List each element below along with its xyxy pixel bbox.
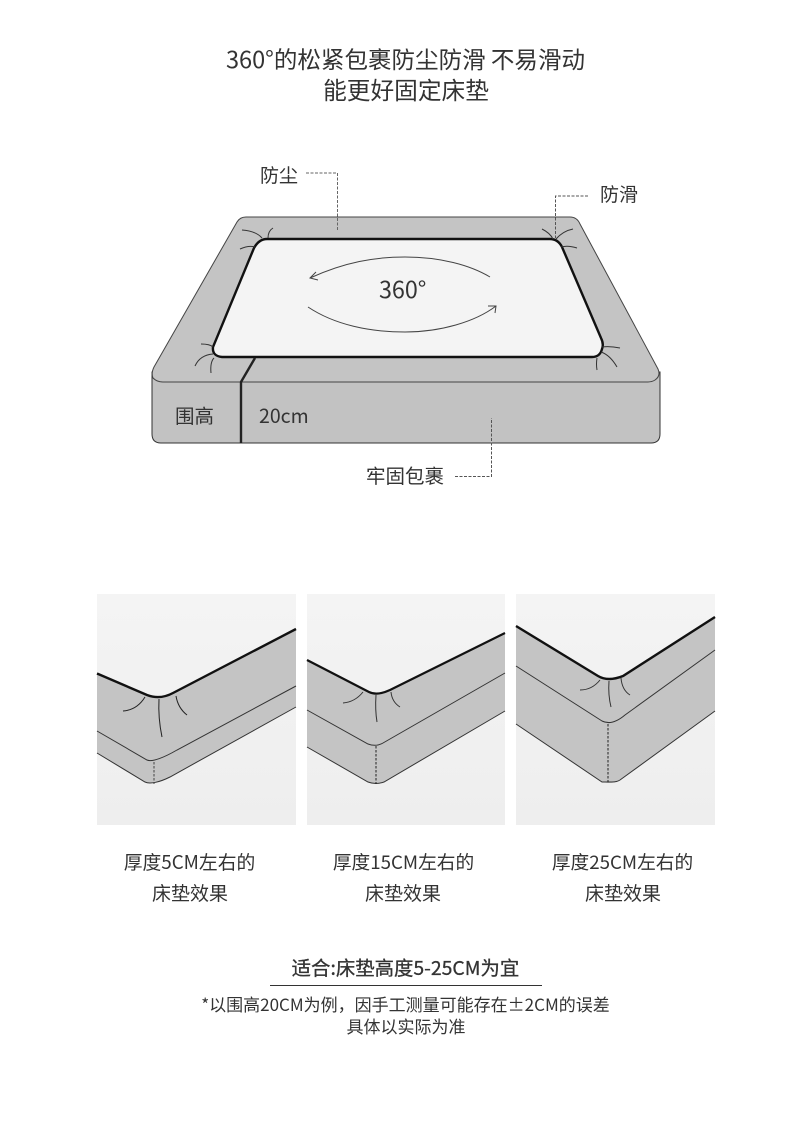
label: 防滑: 防滑 (600, 180, 638, 207)
mattress diagram (152, 161, 660, 489)
corner wrinkles (195, 228, 620, 373)
caption: 25CM (552, 848, 693, 906)
title (226, 41, 585, 106)
label: 围高: 围高 (175, 400, 214, 429)
caption: 5CM: 床垫效果 (152, 879, 228, 906)
mattress front side (152, 372, 660, 443)
panel: 5CM thickness (97, 594, 296, 825)
label: 防尘: 防尘 (260, 161, 298, 188)
caption: 5CM: 厚度5CM左右的 (124, 848, 255, 875)
label: 防尘 (260, 161, 338, 230)
footnote (201, 991, 610, 1038)
caption: 15CM (333, 848, 474, 906)
footer rule (270, 985, 542, 986)
rotation arrows (308, 257, 496, 332)
fitted sheet surface (213, 239, 603, 357)
caption: 25CM: 床垫效果 (585, 879, 661, 906)
panel: 25CM thickness (516, 594, 715, 825)
footnote: *以围高20CM为例，因手工测量可能存在±2CM的误差 (201, 991, 610, 1016)
caption: 5CM (124, 848, 255, 906)
label: 牢固包裹 (366, 418, 492, 489)
title: 能更好固定床垫 (323, 72, 489, 106)
caption: 25CM: 厚度25CM左右的 (552, 848, 693, 875)
footnote: 具体以实际为准 (346, 1013, 466, 1038)
front seam (241, 358, 255, 443)
360 label: 360° (379, 271, 426, 305)
mattress top face (152, 217, 659, 382)
footer heading: 适合:床垫高度5-25CM为宜 (292, 952, 519, 981)
label: 牢固包裹: 牢固包裹 (366, 460, 444, 489)
caption: 15CM: 厚度15CM左右的 (333, 848, 474, 875)
caption: 15CM: 床垫效果 (365, 879, 441, 906)
panel: 15CM thickness (307, 594, 505, 825)
title: 360°的松紧包裹防尘防滑 不易滑动 (226, 41, 585, 75)
label: 防滑 (556, 180, 638, 238)
label: 20cm: 20cm (259, 400, 309, 429)
